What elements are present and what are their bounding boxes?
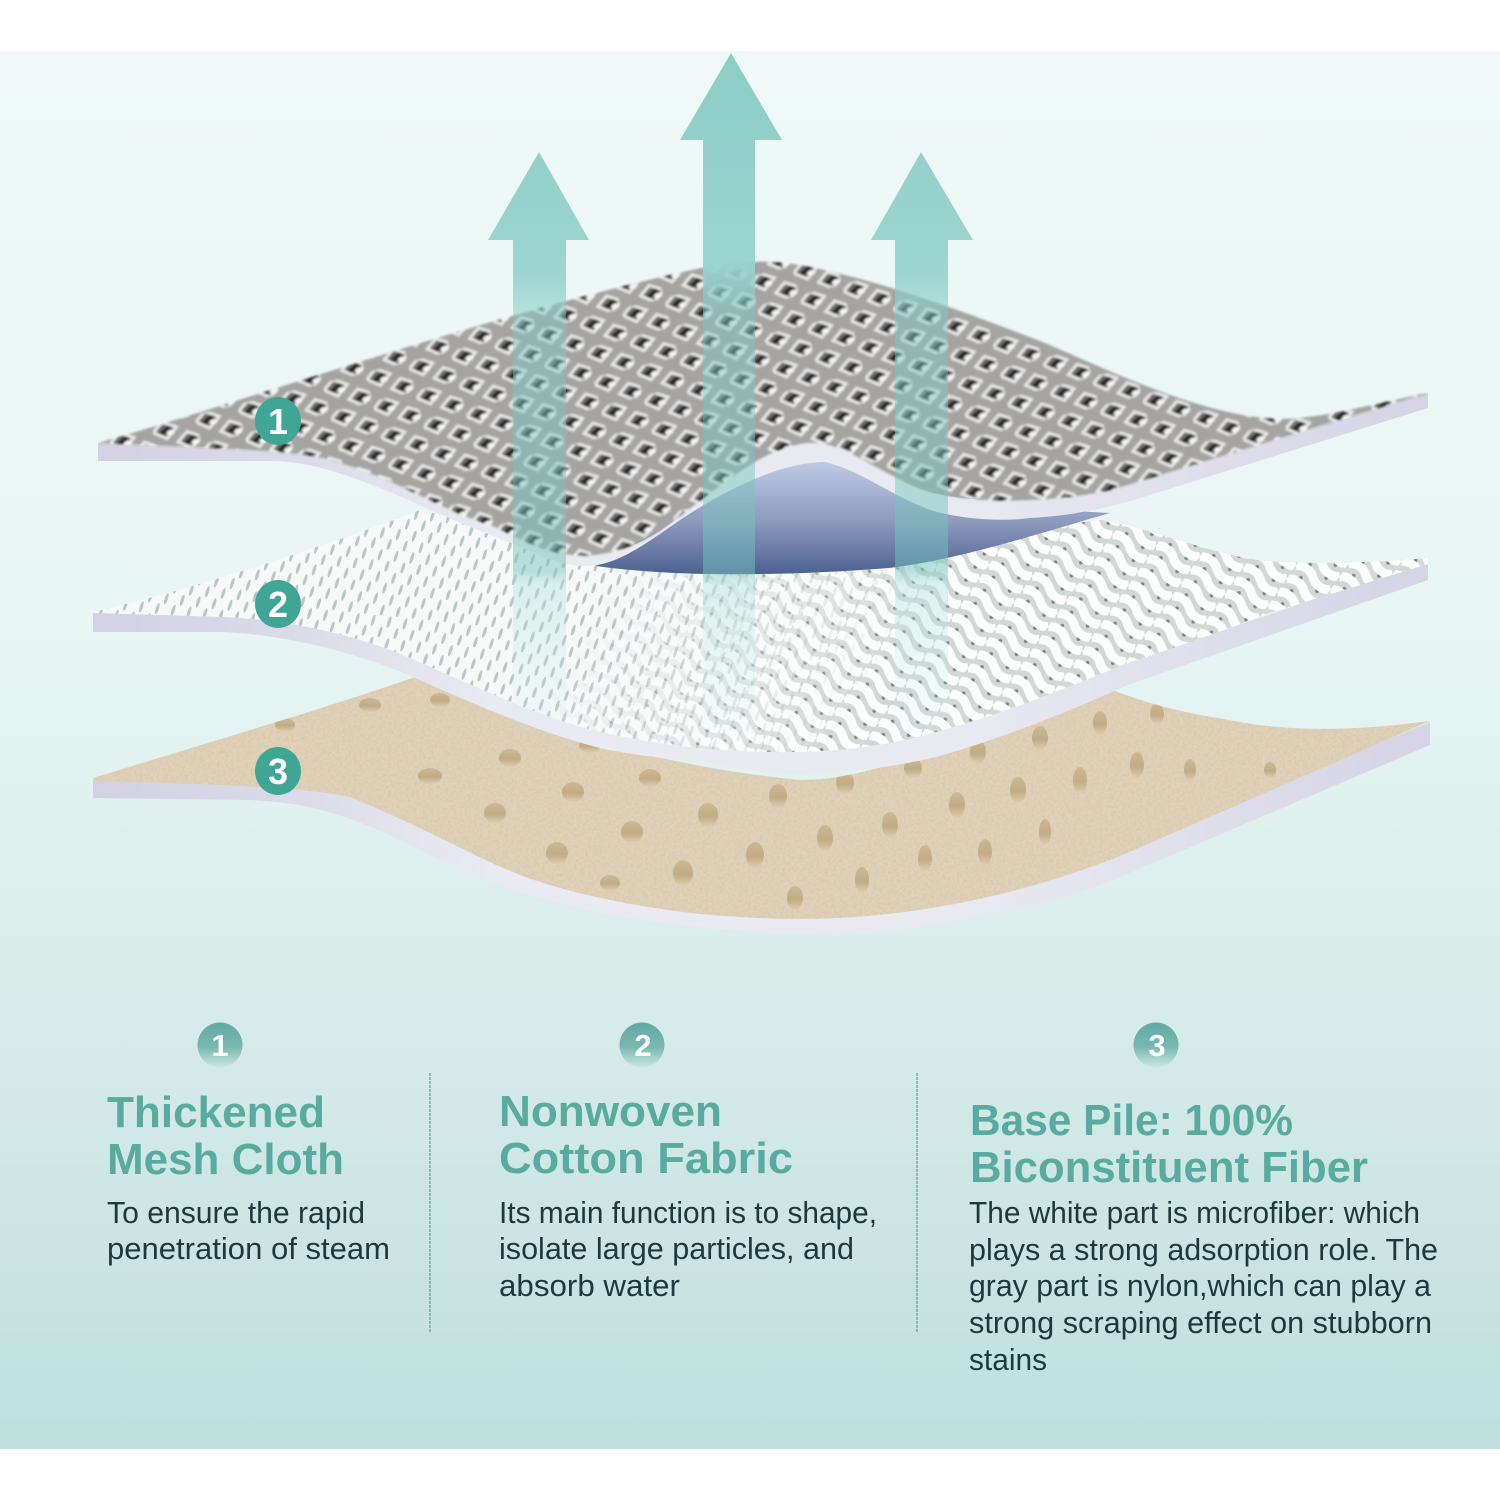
description 3: gray part is nylon,which can play a	[969, 1268, 1432, 1303]
heading 2	[499, 1087, 793, 1183]
number badge 3: 3	[1148, 1028, 1166, 1063]
number badge 1: 1	[211, 1028, 229, 1063]
heading 3: Biconstituent Fiber	[970, 1143, 1368, 1192]
description 1: penetration of steam	[107, 1231, 390, 1266]
number badge 3	[1134, 1022, 1178, 1068]
heading 1	[107, 1088, 344, 1184]
heading 3	[970, 1096, 1368, 1192]
heading 2: Cotton Fabric	[499, 1134, 793, 1183]
number badge 2: 2	[634, 1028, 652, 1063]
layer 1: thickened mesh cloth	[98, 261, 1428, 566]
badge on layer 2	[255, 580, 301, 628]
heading 1: Thickened	[107, 1088, 325, 1137]
heading 1: Mesh Cloth	[107, 1135, 344, 1184]
layer 2 edge strip	[93, 560, 1428, 774]
layer 3 surface	[90, 670, 1435, 930]
layer 2 surface	[93, 510, 1428, 752]
description 3: stains	[969, 1342, 1047, 1377]
arrow middle	[680, 53, 782, 735]
arrow left	[488, 152, 589, 735]
description 3: strong scraping effect on stubborn	[969, 1305, 1432, 1340]
description 3	[969, 1195, 1438, 1377]
number badge 1	[198, 1022, 242, 1068]
arrow right	[871, 152, 973, 735]
description 3: plays a strong adsorption role. The	[969, 1232, 1438, 1267]
description 2: isolate large particles, and	[499, 1231, 854, 1266]
badge on layer 2: 2	[268, 584, 288, 625]
description 1	[107, 1195, 390, 1266]
heading 3: Base Pile: 100%	[970, 1096, 1293, 1145]
layer 1 edge strip	[98, 393, 1428, 566]
layer 3 edge strip	[93, 722, 1430, 935]
heading 2: Nonwoven	[499, 1087, 722, 1136]
description 2	[499, 1195, 877, 1303]
layer 3: beige base pile	[90, 670, 1435, 935]
description 2: Its main function is to shape,	[499, 1195, 877, 1230]
description 1: To ensure the rapid	[107, 1195, 365, 1230]
description 3: The white part is microfiber: which	[969, 1195, 1420, 1230]
layer 3 droplets	[275, 693, 1276, 910]
badge on layer 1	[255, 397, 301, 445]
badge on layer 3: 3	[268, 751, 288, 792]
layer 1 surface	[98, 261, 1428, 556]
column 1: thickened mesh cloth	[107, 1022, 390, 1266]
description 2: absorb water	[499, 1268, 680, 1303]
column 3: base pile	[969, 1022, 1438, 1377]
badge on layer 1: 1	[268, 401, 288, 442]
dark blue underside	[596, 455, 1110, 574]
badge on layer 3	[255, 747, 301, 795]
number badge 2	[620, 1022, 664, 1068]
column 2: nonwoven cotton fabric	[499, 1022, 877, 1303]
layer 2: nonwoven cotton fabric	[80, 500, 1440, 780]
